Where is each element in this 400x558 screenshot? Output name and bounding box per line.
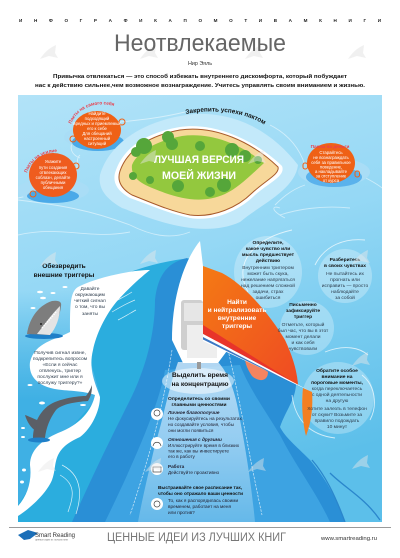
text: define feeling: ошибиться [256, 295, 281, 301]
text: wellbeing: они могли появиться [168, 428, 214, 433]
footer logo: Smart Reading [35, 533, 75, 539]
footer rule [9, 527, 391, 528]
title: Неотвлекаемые [114, 30, 286, 57]
wake foam lines [130, 350, 262, 515]
text: on receiving signal: «Если я сейчас [43, 361, 78, 368]
text: threshold moments: Обратите особое [316, 367, 358, 374]
panel watermarks [38, 150, 370, 472]
highlight ellipse behind heading [162, 368, 234, 394]
text: record trigger: чувствовали [289, 347, 317, 352]
wave: lighter inner band [105, 365, 330, 522]
sail: orange trigger flag [203, 266, 298, 385]
text: understand feelings: за собой [335, 294, 355, 301]
text: threshold moments: на другую [326, 399, 349, 404]
text: record trigger: Отметьте, который [282, 321, 325, 328]
buoy: effort pact: Укажите [45, 159, 62, 164]
dark swirls right [312, 460, 380, 522]
text: schedule question: или против? [168, 510, 195, 515]
buoy: effort pact [24, 150, 80, 198]
text: record trigger: зафиксируйте [286, 307, 320, 314]
footer slogan: ЦЕННЫЕ ИДЕИ ИЗ ЛУЧШИХ КНИГ [107, 532, 287, 544]
text: define feeling [241, 240, 295, 301]
text: values heading [168, 397, 230, 407]
text: relations [168, 437, 240, 459]
text: define feeling: действию [256, 257, 280, 264]
text: wellbeing: Не фокусируйтесь на результатах, [168, 415, 243, 421]
text: threshold moments: 10 минут [327, 424, 348, 430]
current lines [18, 112, 382, 236]
sail stripes and label [203, 298, 308, 390]
text: work: Работа [168, 463, 185, 469]
text: threshold moments: с одной деятельности [312, 391, 362, 398]
buoy: effort pact: обещания [43, 185, 64, 190]
buoy: pact with self: Пакты на самого себя [68, 102, 114, 124]
text: record trigger: Письменно [289, 302, 317, 308]
text: define feeling: над решением сложной [241, 282, 295, 289]
text: on receiving signal [33, 350, 88, 386]
text: on receiving signal: отвлекусь, триггер [39, 369, 81, 374]
text: understand feelings [322, 256, 368, 301]
text: record trigger: момент делали [285, 335, 321, 340]
heading: time for focus [171, 372, 229, 388]
summary text: Привычка отвлекаться — это способ избежать внутреннего дискомфорта, который побуждает [53, 73, 347, 80]
text: define feeling: мысль предшествует [242, 253, 295, 258]
text: schedule question: временем, работает на меня [168, 504, 231, 509]
text: values heading: главными ценностями [171, 403, 227, 408]
buoy: pact with self: подходящий [85, 116, 110, 121]
buoy: money pact: а накладывайте [315, 169, 348, 174]
text: on receiving signal: подкрепитесь вопросом [33, 357, 88, 362]
right translucent circles [234, 236, 374, 434]
text: understand feelings: наблюдайте [331, 288, 359, 295]
text: schedule question [168, 498, 238, 515]
header tagline: И Н Ф О Г Р А Ф И К А П О М О Т И В А М К Н И Г И [19, 18, 381, 23]
text: understand feelings: исправить — просто [322, 284, 368, 289]
text: understand feelings: в своих чувствах [324, 264, 366, 269]
text: give clear signal: окружающим [75, 293, 106, 298]
text: give clear signal: заняты [82, 312, 99, 317]
island label: ЛУЧШАЯ ВЕРСИЯ [154, 154, 244, 166]
island [100, 114, 298, 229]
buoy: money pact: не вознаграждать [313, 155, 350, 160]
text: define feeling: может быть скука, [247, 271, 289, 277]
buoy: pact with self: Для обещаний [82, 131, 112, 136]
text: on receiving signal: послужит мне или я [37, 375, 83, 380]
foam lines on teal [60, 292, 136, 514]
text: record trigger: триггер [294, 315, 312, 320]
icon: stopwatch [151, 498, 163, 510]
text: work [168, 464, 219, 475]
text: threshold moments: Хотите залезть в телефон [307, 406, 367, 412]
island label: МОЕЙ ЖИЗНИ [162, 169, 236, 182]
text: define feeling: задачи, страх [252, 290, 284, 295]
text: wellbeing: но создавайте условия, чтобы [168, 421, 235, 427]
buoy: money pact: за отступление [316, 174, 347, 178]
icon: wellbeing [151, 408, 163, 420]
icon: work [151, 463, 163, 475]
text: schedule heading: чтобы оно отражало ваши ценности [158, 490, 243, 497]
text: understand feelings: Разберитесь [330, 256, 360, 263]
buoy: effort pact: Пакты на усилие [24, 150, 57, 173]
heading: time for focus: Выделить время [172, 372, 228, 379]
text: on receiving signal: послужу триггеру?» [38, 380, 83, 386]
flame tail [302, 388, 312, 436]
footer logo [18, 530, 75, 542]
wave: teal water [18, 258, 192, 522]
text: define feeling: Определите, [253, 240, 284, 246]
text: give clear signal: Давайте [81, 285, 100, 292]
text: relations: Иллюстрируйте время в близких [168, 442, 240, 448]
buoy: effort pact: пути создания [39, 165, 68, 170]
icon: dolphin [25, 385, 92, 442]
white foam wave [18, 270, 150, 516]
buoy: pact with self: его к себе [87, 126, 108, 131]
buoy: effort pact: соблазн, делайте [36, 175, 71, 180]
text: wellbeing: Личное благополучие [167, 409, 220, 415]
buoy: money pact: Пакты на деньги [311, 144, 350, 149]
buoy: pact with self: Найдите [88, 111, 106, 116]
text: threshold moments [307, 367, 367, 430]
text: wellbeing [168, 410, 243, 432]
sail stripes and label: и нейтрализовать [208, 306, 266, 314]
text: work: Действуйте проактивно [168, 469, 220, 475]
text: relations: так же, как вы инвестируете [168, 448, 229, 454]
text: define feeling: нежелание напрягаться [241, 278, 295, 283]
icon: shark [25, 301, 63, 339]
icon: relations [151, 437, 163, 449]
curved label: pact [186, 111, 272, 130]
text: record trigger: был час, что вы в этот [278, 328, 329, 334]
text: threshold moments: внимание на [322, 375, 353, 380]
text: give clear signal: о том, что вы [75, 305, 105, 310]
author: Нир Эяль [188, 61, 212, 67]
sail stripes and label: Найти [227, 298, 247, 306]
buoy: pact with self: настроенный [84, 136, 111, 141]
white droplets [20, 286, 86, 484]
buoy: pact with self [68, 102, 126, 149]
text: define feeling: Внутренним триггером [242, 265, 294, 271]
text: threshold moments: когда переключаетесь [312, 387, 363, 392]
panel: sea illustration: Закрепить успехи пактом [186, 108, 266, 124]
wave: dark blue water [72, 258, 345, 522]
text: record trigger: и как себя [291, 340, 315, 346]
text: record trigger [278, 302, 329, 352]
sail stripes and label: триггеры [222, 323, 252, 330]
buoy: money pact: от курса [323, 178, 340, 183]
heading: time for focus: на концентрацию [171, 381, 229, 388]
summary text [35, 73, 365, 89]
buoy: money pact: себя за правильное [311, 160, 351, 165]
text: schedule question: То, как я распорядилась своими [168, 498, 238, 503]
heading: external triggers: внешние триггеры [34, 272, 95, 279]
text: schedule heading [158, 486, 243, 496]
text: understand feelings: прогнать или [330, 278, 360, 283]
buoy: pact with self: ситуаций [88, 141, 107, 146]
sail stripes and label: внутренние [218, 315, 257, 322]
text: threshold moments: пороговые моменты, [311, 381, 364, 386]
text: define feeling: какое чувство или [246, 247, 290, 252]
buoy: money pact: поведение, [320, 164, 342, 170]
text: give clear signal [74, 286, 106, 315]
heading: external triggers [34, 263, 94, 278]
panel: sea illustration [18, 95, 382, 522]
heading: external triggers: Обезвредить [42, 262, 86, 270]
text: relations: его в работу [168, 454, 196, 459]
puddles under buoys [23, 137, 370, 203]
boat [172, 241, 235, 369]
buoy: pact with self: вредных и приемлемых [73, 121, 122, 126]
text: threshold moments: правило подождать [315, 419, 360, 424]
buoy: money pact [303, 143, 360, 183]
text: understand feelings: Не пытайтесь их [326, 270, 364, 277]
summary text: нас к действию сильнее,чем возможное вознаграждение. Учитесь управлять своим вниманием и жизнью. [35, 82, 365, 89]
footer logo: ценные идеи из лучших книг [35, 538, 68, 542]
text: schedule heading: Выстраивайте свое расписание так, [158, 484, 243, 491]
buoy: effort pact: публичными [41, 180, 66, 185]
footer url: www.smartreading.ru [320, 536, 377, 542]
text: give clear signal: четкий сигнал [74, 297, 106, 304]
text: values heading: Определитесь со своими [168, 396, 230, 402]
text: threshold moments: от скуки? Возьмите за [312, 412, 362, 418]
buoy: effort pact: отвлекающих [39, 170, 67, 175]
header watermarks [40, 45, 366, 59]
text: relations: Отношения с другими [168, 437, 222, 442]
text: on receiving signal: Получив сигнал извне, [34, 350, 86, 356]
buoy: money pact: Старайтесь [319, 150, 343, 155]
wake: center light trail [138, 362, 255, 522]
island label [154, 156, 244, 179]
